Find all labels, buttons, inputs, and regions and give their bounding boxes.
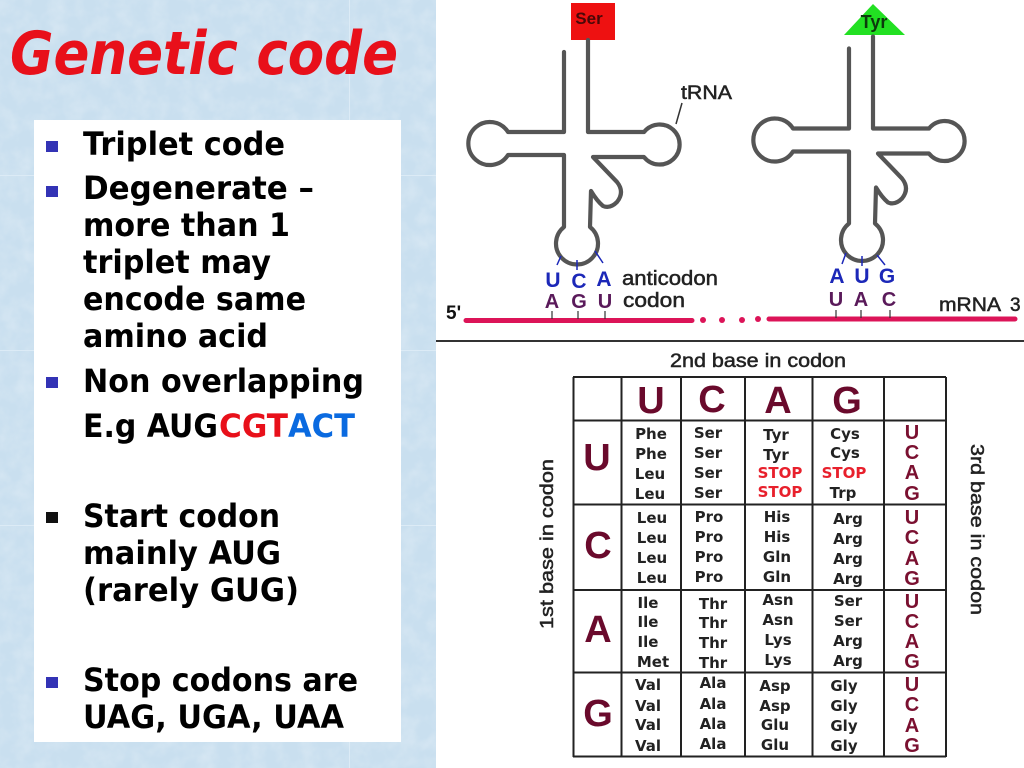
third base column: U xyxy=(905,674,919,696)
anticodon ticks left xyxy=(557,251,603,270)
codon letters right: C xyxy=(882,289,896,311)
third base column: A xyxy=(905,631,919,653)
row A amino acids: Lys xyxy=(764,631,792,649)
third base column: G xyxy=(904,568,920,590)
tRNA: left cloverleaf xyxy=(468,40,680,264)
row C amino acids: Arg xyxy=(833,510,863,528)
table grid xyxy=(573,377,946,757)
anticodon letters right xyxy=(829,265,895,288)
second base headers xyxy=(637,379,862,422)
third base column xyxy=(904,422,920,757)
axis label: 2nd base: 2nd base in codon xyxy=(670,351,846,372)
row C amino acids: His xyxy=(764,508,790,526)
panel: bullet list xyxy=(34,120,401,742)
third base column: U xyxy=(905,422,919,444)
bullet: degenerate: amino acid xyxy=(83,317,268,355)
row C amino acids: Gln xyxy=(763,568,791,586)
row C amino acids: Leu xyxy=(637,509,667,527)
third base column: C xyxy=(905,527,919,549)
row U amino acids: STOP xyxy=(758,483,802,501)
codon letters right: A xyxy=(854,289,868,311)
anticodon letters right: G xyxy=(879,265,895,288)
third base column: C xyxy=(905,611,919,633)
tRNA label: tRNA xyxy=(681,83,732,104)
row C amino acids: Pro xyxy=(695,548,723,566)
row G amino acids: Asp xyxy=(759,697,791,715)
bullet: triplet code: Triplet code xyxy=(83,125,285,163)
amino acid: Tyr xyxy=(844,4,905,35)
row U amino acids: Phe xyxy=(635,445,667,463)
bullet: non overlapping: CGT xyxy=(219,407,288,445)
row U amino acids xyxy=(635,424,866,503)
row C amino acids xyxy=(637,508,863,588)
codon letters left: G xyxy=(571,291,587,313)
codon letters right xyxy=(829,289,896,311)
codon letters left xyxy=(545,291,612,313)
row U amino acids: Cys xyxy=(830,425,860,443)
row U amino acids: Leu xyxy=(635,485,665,503)
row G amino acids: Ala xyxy=(700,674,726,692)
bullet: start codon: (rarely GUG) xyxy=(83,571,299,609)
row A amino acids: Ser xyxy=(834,592,863,610)
bullet: stop codons: UAG, UGA, UAA xyxy=(83,698,344,736)
third base column: G xyxy=(904,735,920,757)
third base column: C xyxy=(905,694,919,716)
row G amino acids: Gly xyxy=(830,677,858,695)
amino acid: Ser xyxy=(571,3,615,40)
second base headers: A xyxy=(764,380,792,422)
codon letters left: A xyxy=(545,291,559,313)
tRNA label xyxy=(676,83,732,124)
row C amino acids: His xyxy=(764,528,790,546)
row A amino acids: Ser xyxy=(834,612,863,630)
row A amino acids: Arg xyxy=(833,652,863,670)
row C amino acids: Pro xyxy=(695,568,723,586)
codon table xyxy=(537,351,987,757)
mRNA label: mRNA xyxy=(939,295,1001,316)
codon label: codon xyxy=(623,290,685,312)
third base column: U xyxy=(905,591,919,613)
row A amino acids: Lys xyxy=(764,651,792,669)
row G amino acids: Gly xyxy=(830,697,858,715)
row A amino acids: Met xyxy=(637,653,669,671)
row G amino acids: Glu xyxy=(761,736,789,754)
panel: textured blue background xyxy=(0,0,436,768)
row U amino acids: STOP xyxy=(822,464,866,482)
amino acid: Ser: Ser xyxy=(575,9,603,28)
bullet: stop codons xyxy=(46,661,358,736)
diagram: tRNA and mRNA xyxy=(446,3,1021,324)
row A amino acids: Thr xyxy=(699,595,728,613)
row C amino acids: Leu xyxy=(637,549,667,567)
row G amino acids xyxy=(635,674,858,755)
first base headers: U xyxy=(583,437,611,479)
row U amino acids: Cys xyxy=(830,444,860,462)
anticodon ticks right xyxy=(842,253,885,266)
bullet: stop codons: Stop codons are xyxy=(83,661,358,699)
third base column: A xyxy=(905,715,919,737)
row A amino acids: Ile xyxy=(638,613,658,631)
bullet: non overlapping: Non overlapping xyxy=(83,362,364,400)
third base column: A xyxy=(905,548,919,570)
row C amino acids: Leu xyxy=(637,569,667,587)
3 prime label: 3 xyxy=(1010,295,1021,316)
mRNA strand xyxy=(466,310,1015,323)
row U amino acids: Phe xyxy=(635,425,667,443)
row C amino acids: Pro xyxy=(695,508,723,526)
axis label: 1st base: 1st base in codon xyxy=(537,459,557,629)
row U amino acids: STOP xyxy=(758,464,802,482)
row G amino acids: Val xyxy=(635,737,661,755)
bullet: non overlapping: ACT xyxy=(288,407,355,445)
bullet: degenerate: encode same xyxy=(83,280,306,318)
row U amino acids: Ser xyxy=(694,484,723,502)
second base headers: G xyxy=(832,380,862,422)
row C amino acids: Arg xyxy=(833,570,863,588)
third base column: G xyxy=(904,483,920,505)
5 prime label: 5' xyxy=(446,303,461,324)
row U amino acids: Tyr xyxy=(763,446,789,464)
title: Genetic code xyxy=(10,19,398,89)
row G amino acids: Ala xyxy=(700,735,726,753)
bullet: start codon xyxy=(46,497,299,609)
row C amino acids: Leu xyxy=(637,529,667,547)
row U amino acids: Trp xyxy=(830,484,857,502)
row A amino acids: Asn xyxy=(762,611,794,629)
row C amino acids: Pro xyxy=(695,528,723,546)
amino acid: Tyr: Tyr xyxy=(861,12,887,32)
row C amino acids: Arg xyxy=(833,550,863,568)
second base headers: C xyxy=(698,379,726,421)
bullet: non overlapping xyxy=(46,362,364,445)
tRNA: right cloverleaf xyxy=(753,36,965,261)
row U amino acids: Ser xyxy=(694,424,723,442)
bullet: degenerate: triplet may xyxy=(83,243,271,281)
row G amino acids: Ala xyxy=(700,695,726,713)
row U amino acids: Tyr xyxy=(763,426,789,444)
row A amino acids: Thr xyxy=(699,634,728,652)
row U amino acids: Leu xyxy=(635,465,665,483)
row A amino acids: Thr xyxy=(699,614,728,632)
row G amino acids: Ala xyxy=(700,715,726,733)
bullet: start codon: mainly AUG xyxy=(83,534,281,572)
bullet: degenerate: Degenerate – xyxy=(83,169,314,207)
codon letters right: U xyxy=(829,289,843,311)
row G amino acids: Asp xyxy=(759,677,791,695)
row G amino acids: Val xyxy=(635,697,661,715)
row C amino acids: Arg xyxy=(833,530,863,548)
anticodon letters left: C xyxy=(571,270,587,293)
row A amino acids: Thr xyxy=(699,654,728,672)
bullet: degenerate: more than 1 xyxy=(83,206,290,244)
anticodon letters left: A xyxy=(596,268,612,291)
row G amino acids: Gly xyxy=(830,717,858,735)
anticodon letters right: A xyxy=(829,265,845,288)
first base headers xyxy=(583,437,613,735)
row A amino acids: Asn xyxy=(762,591,794,609)
row U amino acids: Ser xyxy=(694,444,723,462)
row A amino acids: Ile xyxy=(638,594,658,612)
anticodon letters right: U xyxy=(854,265,870,288)
anticodon letters left: U xyxy=(545,269,561,292)
row A amino acids: Arg xyxy=(833,632,863,650)
anticodon label: anticodon xyxy=(622,268,718,290)
second base headers: U xyxy=(637,380,665,422)
third base column: A xyxy=(905,462,919,484)
row A amino acids: Ile xyxy=(638,633,658,651)
anticodon letters left xyxy=(545,268,612,293)
codon letters left: U xyxy=(598,291,612,313)
row G amino acids: Val xyxy=(635,716,661,734)
row A amino acids xyxy=(637,591,863,672)
row U amino acids: Ser xyxy=(694,464,723,482)
first base headers: C xyxy=(584,525,612,567)
first base headers: A xyxy=(584,609,612,651)
third base column: C xyxy=(905,442,919,464)
row C amino acids: Gln xyxy=(763,548,791,566)
bullet: non overlapping: E.g AUG xyxy=(83,407,218,445)
bullet: start codon: Start codon xyxy=(83,497,280,535)
row G amino acids: Val xyxy=(635,676,661,694)
row G amino acids: Glu xyxy=(761,716,789,734)
first base headers: G xyxy=(583,693,613,735)
third base column: U xyxy=(905,507,919,529)
row G amino acids: Gly xyxy=(830,737,858,755)
bullet: degenerate xyxy=(46,169,314,355)
third base column: G xyxy=(904,651,920,673)
axis label: 3rd base: 3rd base in codon xyxy=(967,444,987,615)
